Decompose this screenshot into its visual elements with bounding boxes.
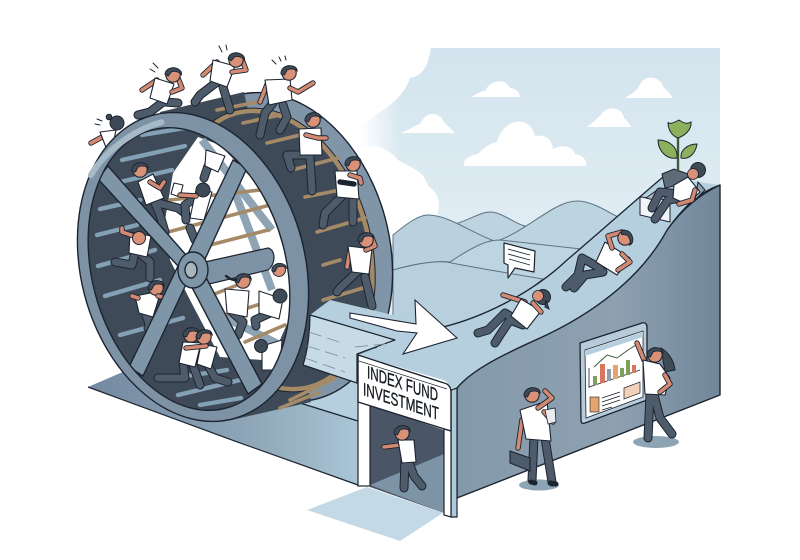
woman presenting bbox=[633, 343, 679, 448]
woman lying on ramp bbox=[478, 290, 550, 343]
left pillar bbox=[358, 402, 370, 486]
background sky bbox=[362, 48, 720, 328]
sign text bbox=[363, 361, 439, 424]
small chart bbox=[624, 382, 640, 399]
rear frame spokes bbox=[202, 140, 280, 345]
plant in pot bbox=[658, 120, 697, 188]
sign text: INDEX FUND bbox=[367, 361, 438, 405]
inner brown rungs bbox=[168, 190, 285, 342]
right pillar bbox=[444, 429, 451, 517]
runner: mid right in drum bbox=[323, 157, 361, 225]
conveyor front face bbox=[303, 315, 395, 383]
runner: inner lower right bbox=[254, 340, 282, 370]
gate floor bbox=[370, 454, 444, 513]
runner: top left partial bbox=[91, 114, 124, 150]
gate side post bbox=[451, 388, 457, 517]
hamster wheel bbox=[91, 45, 426, 428]
ramp edges bbox=[443, 177, 720, 388]
bar chart bbox=[589, 345, 640, 388]
ramp surface bbox=[310, 177, 720, 388]
runner: fourth on top bbox=[260, 56, 313, 135]
clouds bbox=[350, 40, 673, 245]
speech bubble bbox=[504, 243, 535, 278]
mountains bbox=[393, 201, 620, 340]
man relaxing on chair at top bbox=[640, 162, 706, 222]
wheel drum body bbox=[140, 85, 406, 421]
runner: third on top bbox=[195, 45, 246, 110]
drum tread rungs bbox=[217, 102, 365, 408]
person walking out of gate bbox=[384, 426, 422, 488]
runner: inner center with papers bbox=[171, 183, 212, 240]
runner: inner top left bbox=[132, 163, 186, 232]
runner: inner lower left bbox=[132, 281, 166, 328]
runner: inner right white shirt bbox=[255, 263, 287, 326]
briefcase bbox=[510, 451, 530, 471]
ground shadow bbox=[307, 487, 443, 541]
main wall of ramp bbox=[457, 185, 720, 498]
text lines bbox=[602, 392, 620, 410]
gate opening bbox=[370, 405, 444, 513]
chart screen on wall bbox=[580, 323, 647, 423]
axle bbox=[205, 248, 274, 285]
runner: second on top bbox=[138, 63, 183, 115]
runners: pair at bottom bbox=[158, 328, 228, 385]
runner: back view white shirt top bbox=[204, 150, 225, 178]
man lying on ramp bbox=[566, 228, 635, 288]
sign board bbox=[358, 355, 451, 431]
runner: inner right ponytail bbox=[225, 274, 251, 335]
runner: upper right in drum bbox=[287, 113, 326, 191]
wheel back rim bbox=[128, 66, 426, 428]
orange panel bbox=[590, 397, 599, 412]
arrow bbox=[350, 300, 457, 354]
wheel base platform bbox=[88, 330, 358, 485]
sign text: INVESTMENT bbox=[363, 378, 439, 424]
see-through opening bbox=[165, 137, 290, 360]
inner grey rungs bbox=[97, 128, 241, 405]
front rim bbox=[44, 86, 342, 448]
hub bbox=[178, 252, 208, 288]
man with briefcase bbox=[510, 388, 559, 490]
runner: lower right in drum bbox=[337, 233, 375, 306]
spokes bbox=[98, 160, 262, 394]
runner: inner left back view bbox=[115, 228, 151, 278]
wheel front interior bbox=[44, 86, 342, 448]
